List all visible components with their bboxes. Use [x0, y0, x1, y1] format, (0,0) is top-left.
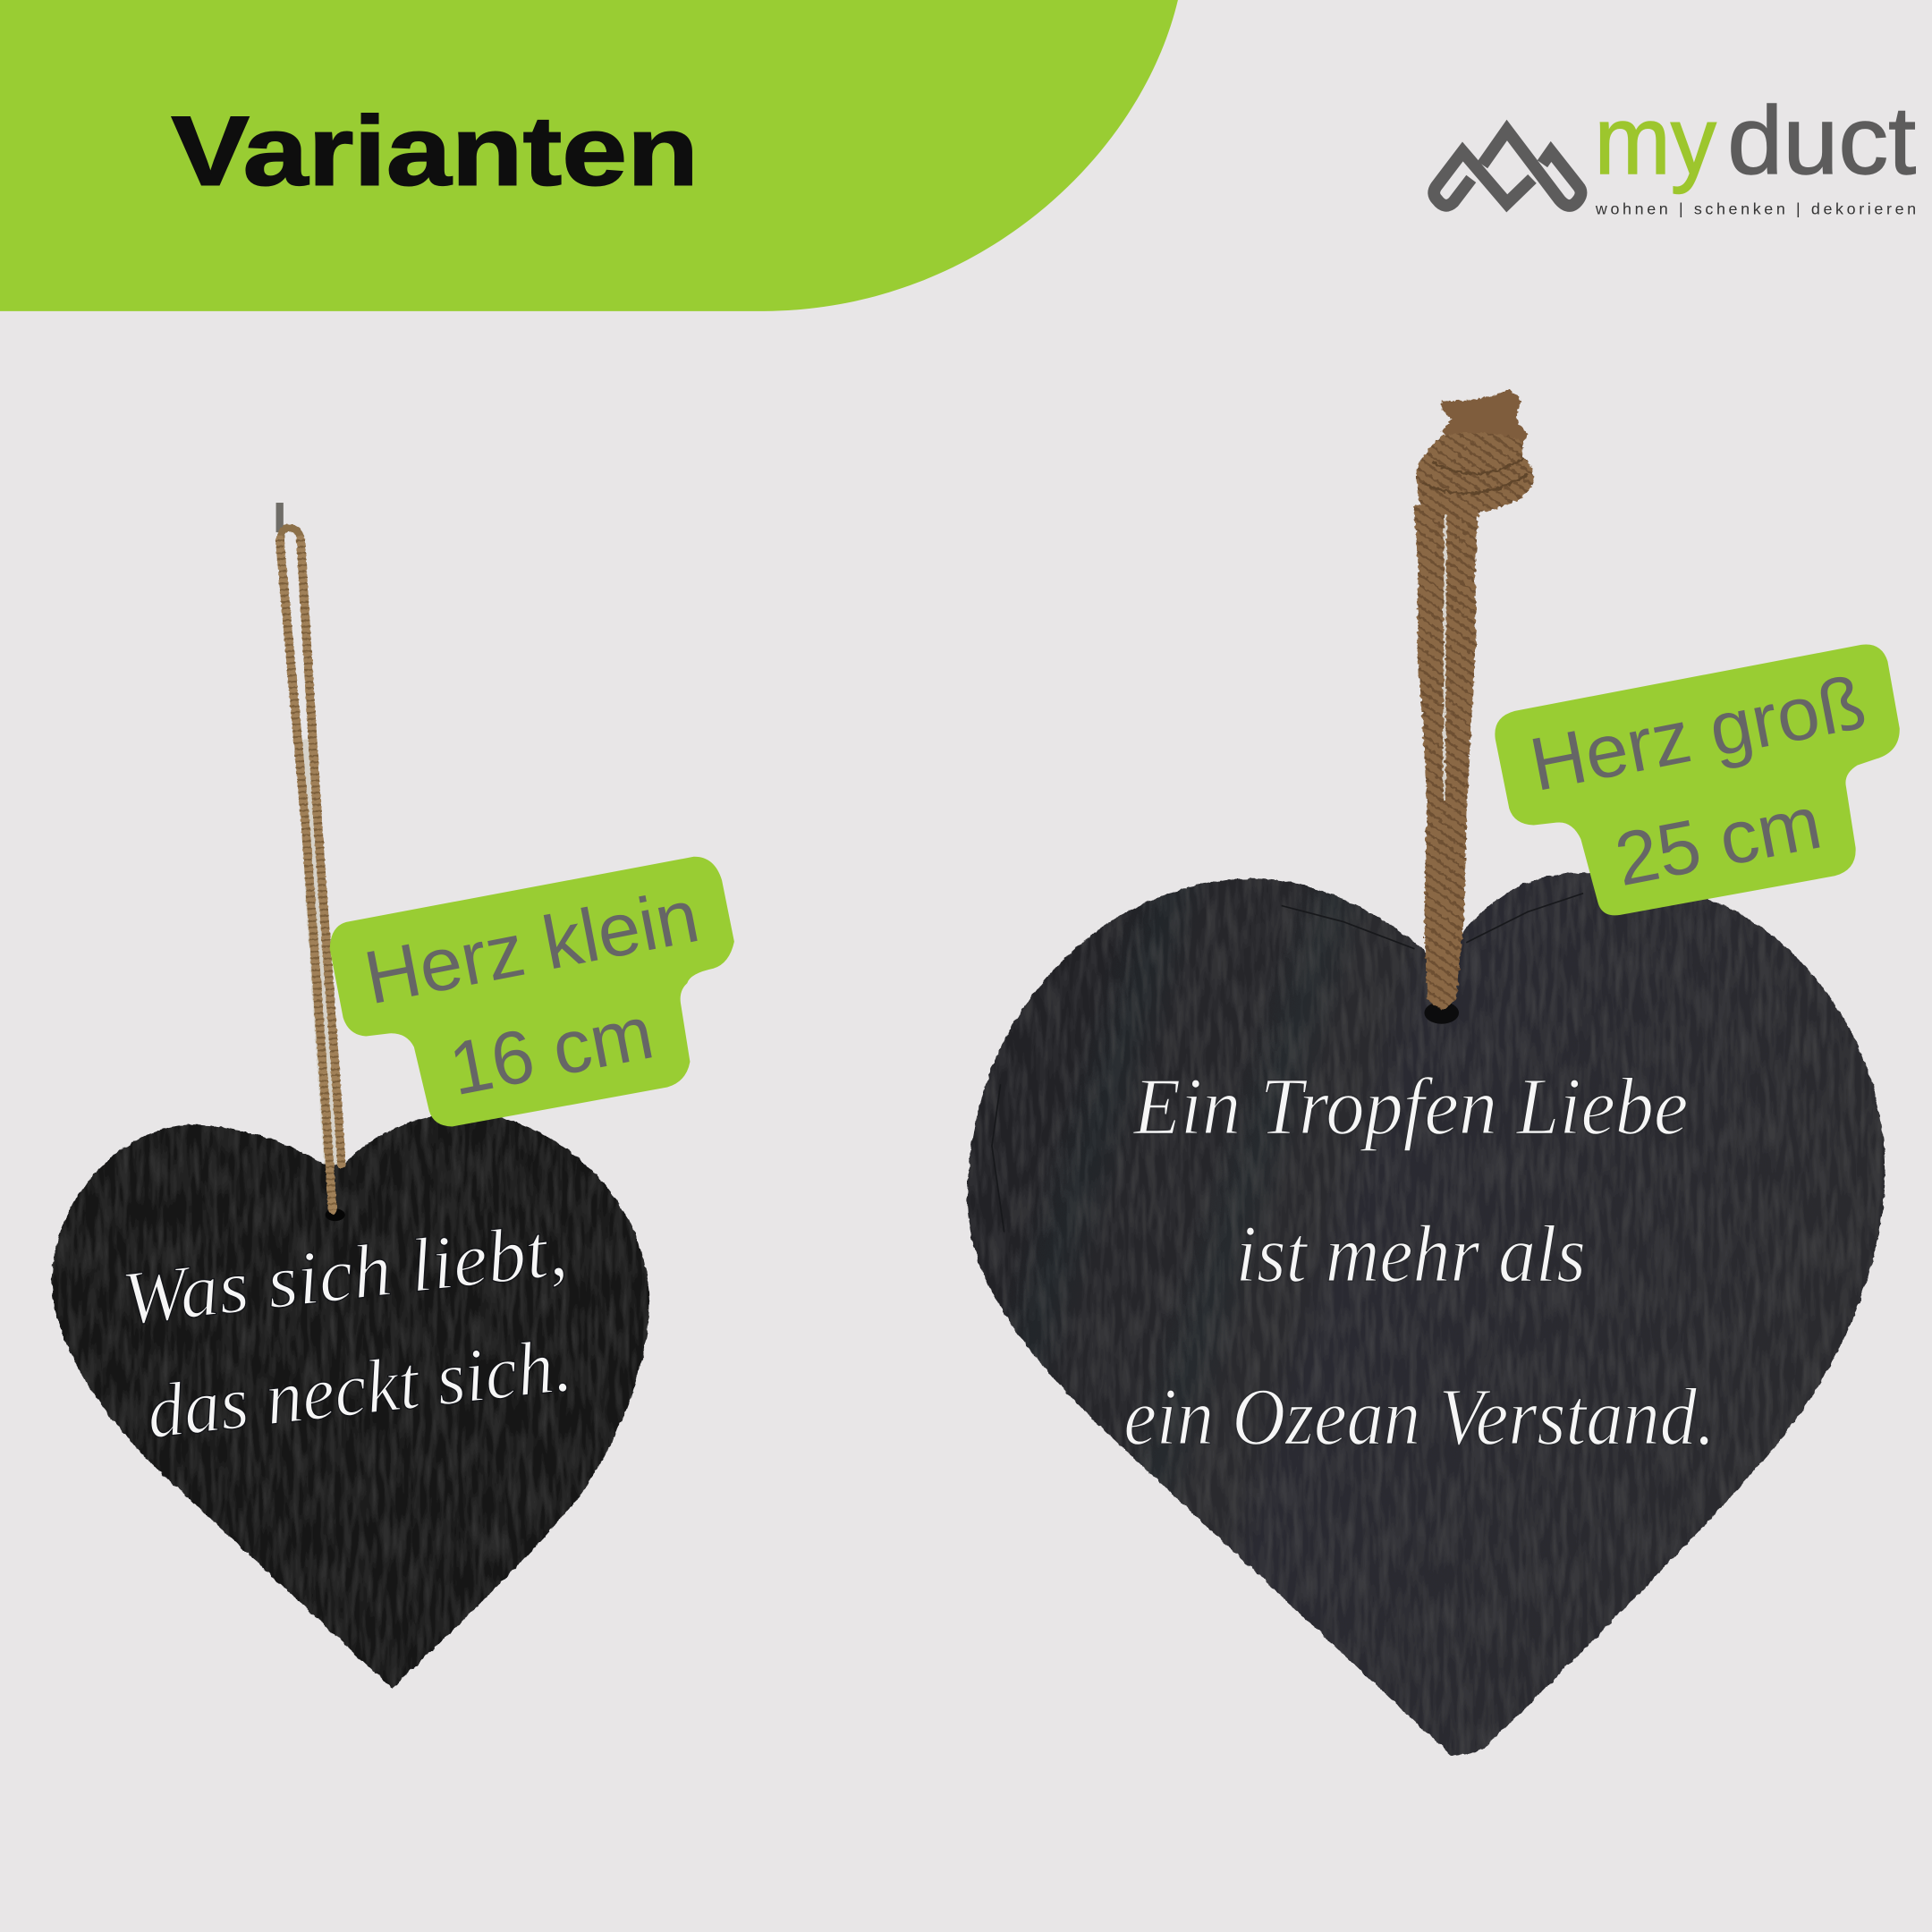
line 1 large: Ein Tropfen Liebe — [1131, 1061, 1688, 1151]
engraved text small heart — [118, 1208, 576, 1454]
logo wordmark: my: my — [1595, 87, 1716, 194]
line 1 small: Was sich liebt, — [118, 1208, 571, 1342]
slate cracks — [992, 894, 1583, 1233]
cord small — [280, 528, 342, 1210]
label text small line 2: 16 cm — [443, 989, 660, 1111]
slate heart large — [967, 873, 1885, 1756]
small heart with cord — [52, 503, 649, 1688]
slate heart small — [52, 1114, 649, 1688]
label small heart — [330, 857, 734, 1126]
logo tagline: wohnen | schenken | dekorieren — [1595, 200, 1916, 218]
logo — [1434, 87, 1916, 218]
line 3 large: ein Ozean Verstand. — [1123, 1371, 1716, 1462]
cord strands — [1414, 505, 1479, 1011]
logo wordmark: duct: duct — [1727, 87, 1916, 194]
label shape large — [1495, 644, 1900, 915]
drill hole small — [326, 1208, 345, 1221]
label large heart — [1495, 644, 1900, 915]
label text large line 1: Herz groß — [1523, 660, 1872, 807]
cord large — [1414, 505, 1479, 1011]
large heart with cord — [967, 389, 1885, 1756]
label text small line 1: Herz klein — [358, 873, 706, 1020]
title: Varianten — [171, 97, 699, 207]
drill hole large — [1424, 1002, 1459, 1024]
cord knot — [1416, 389, 1533, 514]
header banner — [0, 0, 1178, 311]
line 2 large: ist mehr als — [1236, 1209, 1586, 1300]
label text large line 2: 25 cm — [1608, 780, 1827, 902]
logo icon: mountains — [1434, 130, 1581, 206]
label shape small — [330, 857, 734, 1126]
line 2 small: das neckt sich. — [143, 1323, 576, 1454]
nail — [276, 503, 284, 532]
engraved text large heart — [1123, 1061, 1716, 1462]
